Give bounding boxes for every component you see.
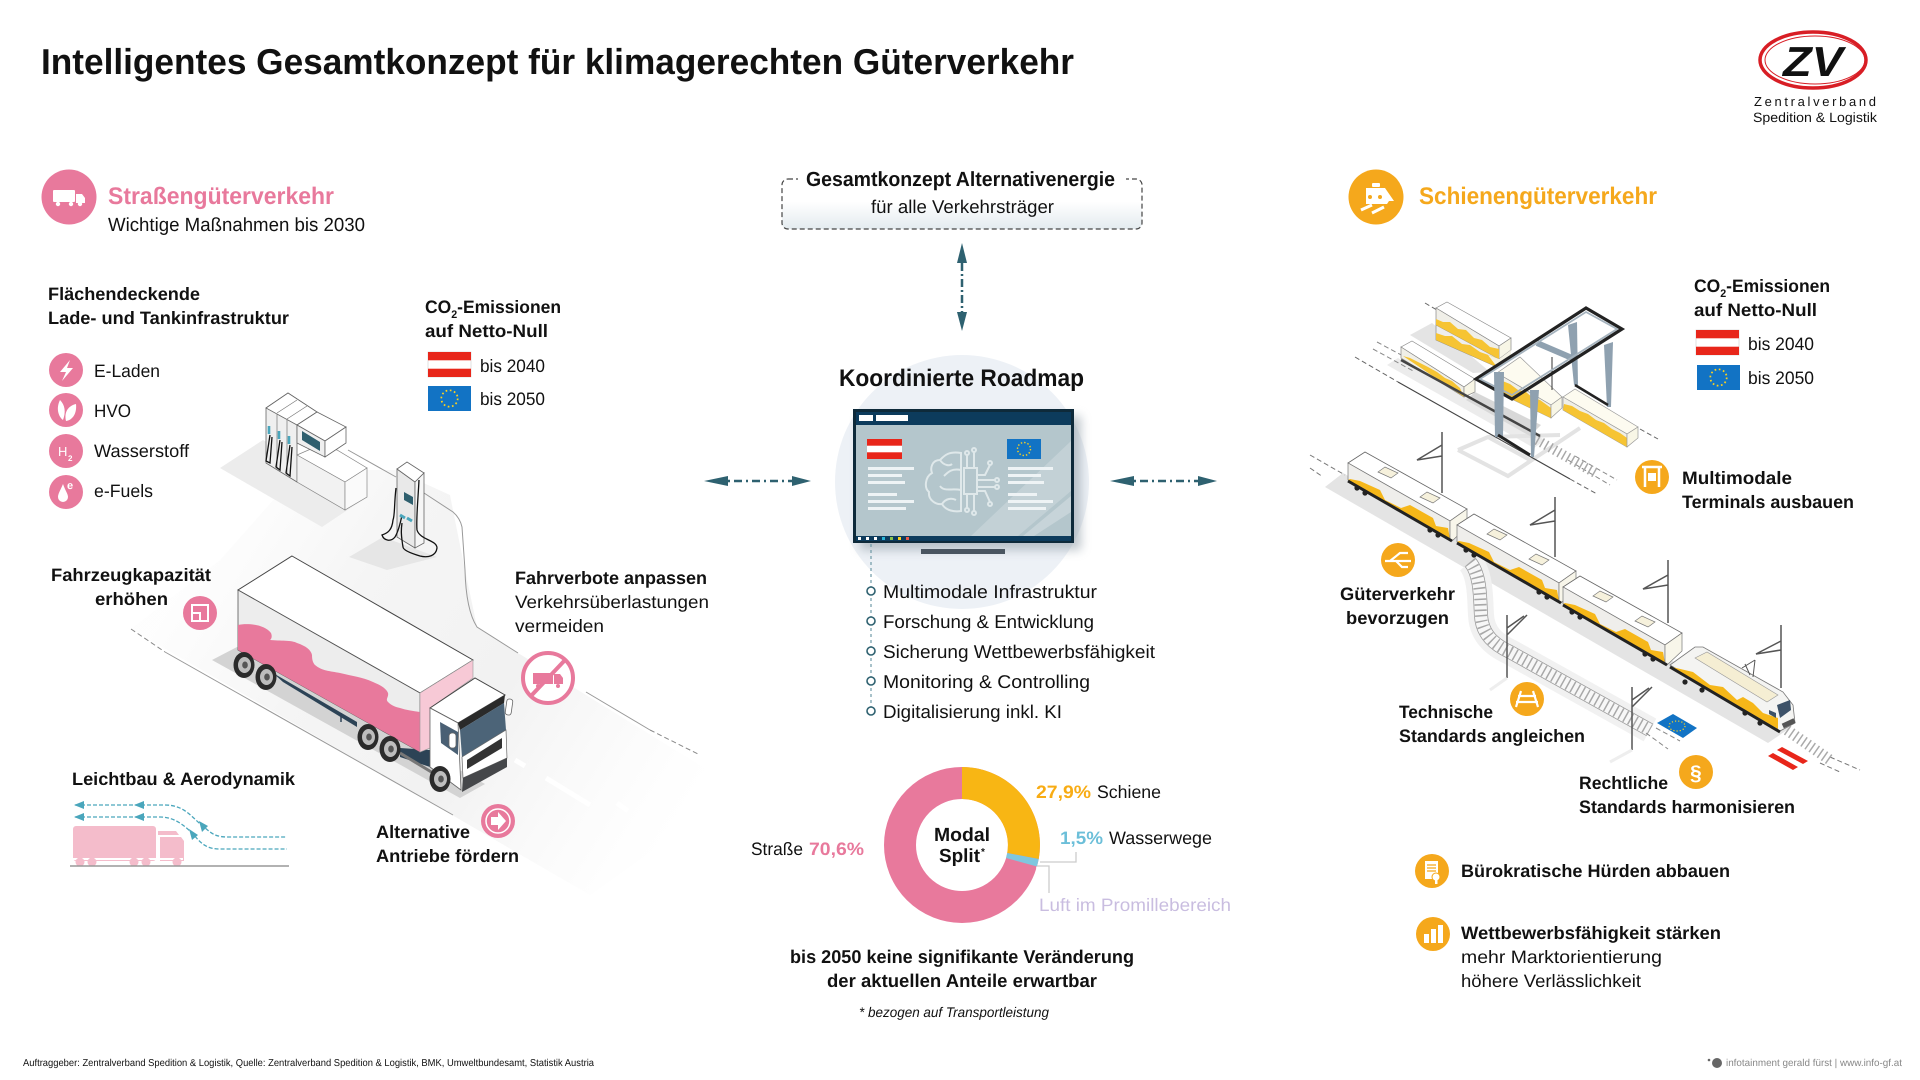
heading: Koordinierte Roadmap: Koordinierte Roadmap xyxy=(839,365,1084,392)
train illustration xyxy=(1310,432,1860,772)
label: Multimodale Terminals xyxy=(1682,468,1854,512)
label: Güterverkehr bevorzugen: bevorzugen xyxy=(1346,608,1449,628)
roadmap background circle xyxy=(835,355,1089,609)
footer source: Auftraggeber: Zentralverband Spedition & Logistik, Quelle: Zentralverband Spedition & Logistik, BMK, Umweltbundesamt, Statistik Austria xyxy=(23,1058,594,1069)
label: Fahrverbote xyxy=(515,568,709,636)
footer credit: infotainment gerald fürst | www.info-gf.at xyxy=(1726,1058,1902,1069)
box: Gesamtkonzept Alternativenergie: für alle Verkehrsträger xyxy=(871,196,1054,217)
CO2 targets road xyxy=(425,297,561,411)
logo: Zentralverband Spedition & Logistik: Zentralverband xyxy=(1754,94,1876,109)
icon: e-Fuels: e xyxy=(67,480,73,492)
CO2 targets rail: bis 2050 xyxy=(1748,368,1814,388)
roadmap list: Digitalisierung inkl. KI xyxy=(883,701,1062,722)
locomotive xyxy=(1670,647,1796,732)
CO2 targets rail: CO xyxy=(1694,276,1721,296)
icon: vehicle capacity xyxy=(183,596,217,630)
label: Rechtliche Standards: Rechtliche xyxy=(1579,773,1668,793)
arrow: right two-way xyxy=(1110,476,1217,486)
label: Straße xyxy=(751,839,864,859)
label: Alternative Antriebe xyxy=(376,822,519,866)
title: Intelligentes Gesamtkonzept für klimagerechten Güterverkehr xyxy=(41,41,1074,82)
label: Straße: Straße xyxy=(751,839,803,859)
CO2 targets road: -Emissionen xyxy=(457,297,561,317)
CO2 targets rail: -Emissionen xyxy=(1726,276,1830,296)
CO2 targets road: auf Netto-Null xyxy=(425,321,548,341)
label: Fahrzeugkapazität: Fahrzeugkapazität xyxy=(51,565,211,585)
flag on track: AT xyxy=(1768,747,1808,770)
infrastructure heading: Flächendeckende xyxy=(48,284,200,304)
icon: paragraph xyxy=(1679,755,1713,789)
modal split note: der aktuellen Anteile erwartbar xyxy=(827,970,1097,991)
label: Fahrzeugkapazität: erhöhen xyxy=(95,589,168,609)
logo: Zentralverband Spedition & Logistik xyxy=(1753,32,1877,125)
crane-side containers xyxy=(1497,357,1562,405)
aerodynamics diagram xyxy=(70,801,289,866)
label: Wasserwege xyxy=(1060,828,1212,848)
logo: Zentralverband Spedition & Logistik: ZV xyxy=(1782,38,1846,85)
CO2 targets rail: 2 xyxy=(1720,288,1726,300)
icon: no truck xyxy=(523,653,573,703)
rail freight heading: Schienengüterverkehr xyxy=(1419,183,1657,210)
label: Leichtbau: Leichtbau & Aerodynamik xyxy=(72,769,296,789)
CO2 targets rail xyxy=(1694,276,1830,390)
label: HVO: HVO xyxy=(94,401,131,421)
label: Bürokratische Hürden: Bürokratische Hürden abbauen xyxy=(1461,861,1730,881)
label: Wettbewerbsfähigkeit: mehr Marktorientierung xyxy=(1461,947,1662,967)
fuel station xyxy=(220,393,437,570)
fuel list xyxy=(49,353,190,509)
rail freight header icon xyxy=(1348,170,1404,224)
road freight header icon xyxy=(42,170,96,224)
icon: Wasserstoff: H xyxy=(58,444,67,459)
roadmap list: Monitoring & Controlling xyxy=(883,671,1090,692)
label: Alternative Antriebe: Alternative xyxy=(376,822,470,842)
roadmap list xyxy=(867,544,1155,722)
label: Rechtliche Standards xyxy=(1579,773,1795,817)
roadmap list: Sicherung Wettbewerbsfähigkeit xyxy=(883,641,1155,662)
box: Gesamtkonzept Alternativenergie xyxy=(782,168,1142,229)
containers xyxy=(1436,302,1511,367)
logo: Zentralverband Spedition & Logistik: Spedition & Logistik xyxy=(1753,110,1877,125)
label: Schiene: Schiene xyxy=(1097,782,1161,802)
icon: Wasserstoff xyxy=(49,434,83,468)
donut chart: modal split: Modal xyxy=(934,825,990,846)
label: Wasserwege: 1,5% xyxy=(1060,828,1103,848)
label: Multimodale Terminals: Multimodale xyxy=(1682,468,1792,488)
label: Multimodale Terminals: Terminals ausbauen xyxy=(1682,492,1854,512)
panel: road freight xyxy=(42,170,740,895)
icon: preference xyxy=(1381,543,1415,577)
road freight heading: Wichtige Maßnahmen bis 2030 xyxy=(108,215,365,236)
CO2 targets road: CO xyxy=(425,297,452,317)
label: Fahrverbote: Verkehrsüberlastungen xyxy=(515,592,709,612)
terminal illustration xyxy=(1355,302,1658,494)
label: Technische Standards: Technische xyxy=(1399,702,1493,722)
icon: AI brain and chip xyxy=(926,448,999,515)
label: Wasserstoff: Wasserstoff xyxy=(94,441,190,461)
donut chart: modal split: * xyxy=(981,847,985,858)
roadmap list: Forschung & Entwicklung xyxy=(883,611,1094,632)
CO2 targets road: bis 2040 xyxy=(480,356,545,376)
infrastructure heading: Lade- und Tankinfrastruktur xyxy=(48,308,289,328)
icon: paragraph: § xyxy=(1690,762,1702,785)
CO2 targets rail: auf Netto-Null xyxy=(1694,300,1817,320)
truck xyxy=(212,556,513,798)
box: Gesamtkonzept Alternativenergie: Gesamtkonzept Alternativenergie xyxy=(806,168,1115,191)
panel: center xyxy=(704,168,1231,1020)
label: E-Laden: E-Laden xyxy=(94,361,160,381)
infrastructure heading xyxy=(48,284,289,328)
label: Fahrverbote: vermeiden xyxy=(515,616,604,636)
label: Rechtliche Standards: Standards harmonisieren xyxy=(1579,797,1795,817)
label: Technische Standards: Standards angleichen xyxy=(1399,726,1585,746)
label: Schiene xyxy=(1036,782,1161,802)
label: Straße: 70,6% xyxy=(809,839,864,859)
label: Fahrzeugkapazität xyxy=(51,565,211,609)
road freight heading: Straßengüterverkehr xyxy=(108,183,334,210)
label: Wettbewerbsfähigkeit xyxy=(1461,923,1721,991)
label: Alternative Antriebe: Antriebe fördern xyxy=(376,846,519,866)
icon: terminal xyxy=(1635,460,1669,494)
roadmap list: Multimodale Infrastruktur xyxy=(883,581,1097,602)
footnote: * bezogen auf Transportleistung xyxy=(859,1004,1049,1020)
label: Wasserwege: Wasserwege xyxy=(1109,828,1212,848)
gantry crane xyxy=(1476,308,1622,457)
charging post xyxy=(382,462,437,557)
icon: HVO xyxy=(49,393,83,427)
masts xyxy=(1417,432,1781,750)
icon: competitiveness xyxy=(1416,917,1450,951)
flag on track: EU xyxy=(1657,714,1697,738)
label: e-Fuels: e-Fuels xyxy=(94,481,153,501)
CO2 targets rail: bis 2040 xyxy=(1748,334,1814,354)
road freight heading xyxy=(108,183,365,236)
donut chart: modal split: Split xyxy=(939,846,981,867)
road illustration xyxy=(131,393,740,895)
wagon load xyxy=(1401,341,1475,387)
label: Technische Standards xyxy=(1399,702,1585,746)
icon: e-Fuels xyxy=(49,475,83,509)
icon: Wasserstoff: 2 xyxy=(68,454,73,463)
icon: bureaucracy xyxy=(1415,854,1449,888)
CO2 targets road: bis 2050 xyxy=(480,389,545,409)
label: Wettbewerbsfähigkeit: Wettbewerbsfähigkeit stärken xyxy=(1461,923,1721,943)
label: Luft: Luft im Promillebereich xyxy=(1039,895,1231,915)
arrow: left two-way xyxy=(704,476,811,486)
label: Schiene: 27,9% xyxy=(1036,782,1091,802)
donut chart: modal split xyxy=(900,767,1076,907)
label: Güterverkehr bevorzugen xyxy=(1340,584,1455,628)
icon: E-Laden xyxy=(49,353,83,387)
modal split note xyxy=(790,946,1134,991)
label: Wettbewerbsfähigkeit: höhere Verlässlichkeit xyxy=(1461,971,1641,991)
monitor xyxy=(853,409,1081,554)
modal split note: bis 2050 keine signifikante Veränderung xyxy=(790,946,1134,967)
icon: alternative drives xyxy=(481,804,515,838)
arrow: vertical two-way xyxy=(957,243,967,331)
side track xyxy=(1470,562,1680,749)
panel: rail freight xyxy=(1310,170,1860,991)
label: Fahrverbote: Fahrverbote anpassen xyxy=(515,568,707,588)
CO2 targets road: 2 xyxy=(451,309,457,321)
icon: track standards xyxy=(1510,682,1544,716)
label: Güterverkehr bevorzugen: Güterverkehr xyxy=(1340,584,1455,604)
